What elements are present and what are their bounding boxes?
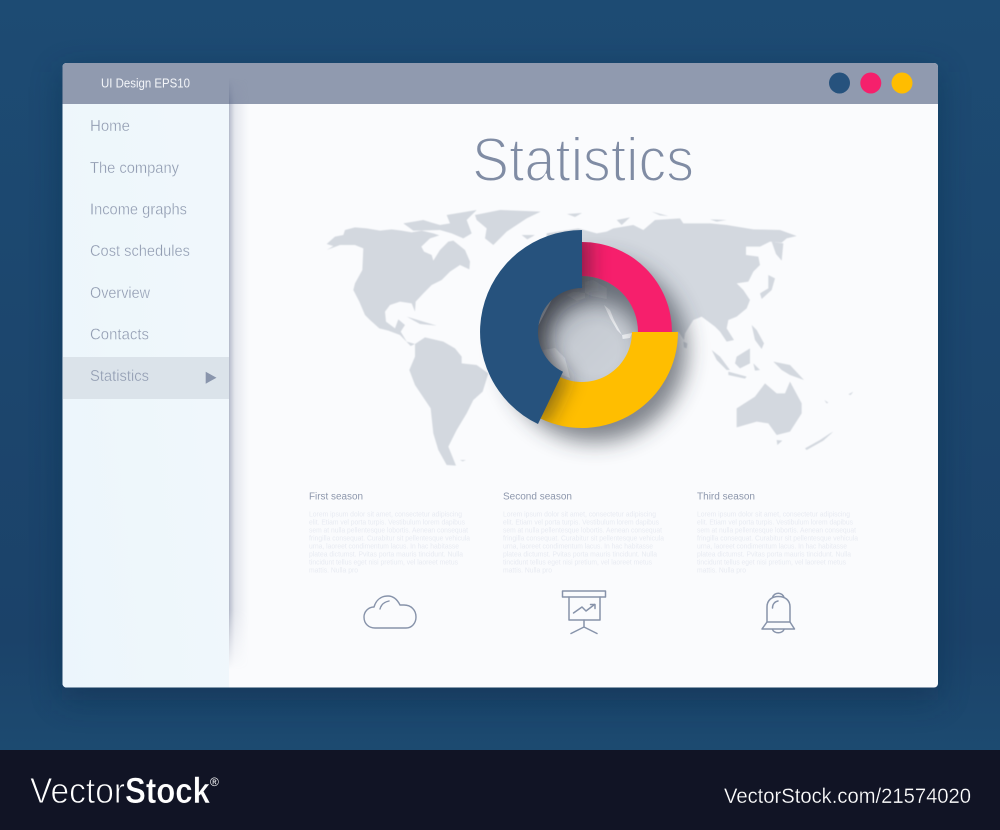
body text: fringilla consequat. Curabitur sit pellentesque vehicula bbox=[503, 534, 665, 542]
column: second season bbox=[503, 492, 665, 574]
body text: fringilla consequat. Curabitur sit pellentesque vehicula bbox=[697, 534, 859, 542]
body text: urna, laoreet condimentum lacus. In hac habitasse bbox=[697, 542, 847, 550]
heading: Second season bbox=[503, 492, 572, 502]
footer logo: ® bbox=[210, 775, 219, 789]
donut drop shadow bbox=[503, 258, 687, 442]
icon: cloud bbox=[364, 596, 416, 628]
footer logo: Vector bbox=[30, 770, 125, 811]
body text: elit. Etiam vel porta turpis. Vestibulum lorem dapibus bbox=[697, 518, 853, 526]
body text: platea dictumst. Pvitas porta mauris tincidunt. Nulla bbox=[697, 550, 852, 558]
footer image id: VectorStock.com/21574020 bbox=[724, 784, 971, 808]
body text bbox=[503, 510, 665, 574]
nav: Overview: Overview bbox=[90, 285, 151, 302]
column: third season bbox=[697, 492, 859, 574]
heading: Third season bbox=[697, 492, 755, 502]
body text: platea dictumst. Pvitas porta mauris tincidunt. Nulla bbox=[503, 550, 658, 558]
panel: sidebar navigation bbox=[62, 104, 229, 688]
nav: Contacts: Contacts bbox=[90, 326, 149, 344]
header bar bbox=[62, 63, 938, 104]
body text: tincidunt tellus eget nisi pretium, vel laoreet metus bbox=[503, 558, 652, 566]
nav: Home: Home bbox=[90, 118, 130, 135]
body text: platea dictumst. Pvitas porta mauris tincidunt. Nulla bbox=[309, 550, 464, 558]
body text: sem at nulla pellentesque lobortis. Aenean consequat bbox=[503, 526, 662, 534]
window shadow bbox=[62, 72, 938, 700]
body text bbox=[697, 510, 859, 574]
body text: fringilla consequat. Curabitur sit pellentesque vehicula bbox=[309, 534, 471, 542]
body text: mattis. Nulla pro bbox=[309, 566, 358, 574]
body text: tincidunt tellus eget nisi pretium, vel laoreet metus bbox=[309, 558, 458, 566]
body text: urna, laoreet condimentum lacus. In hac habitasse bbox=[503, 542, 653, 550]
body text: Lorem ipsum dolor sit amet, consectetur adipiscing bbox=[309, 510, 462, 518]
active item highlight bbox=[63, 357, 229, 399]
footer logo bbox=[30, 770, 219, 811]
title: Statistics bbox=[472, 126, 694, 195]
segment: blue bbox=[480, 230, 582, 424]
panel: app window bbox=[62, 63, 938, 688]
nav: Statistics: Statistics bbox=[90, 368, 149, 385]
window control dots bbox=[829, 72, 912, 94]
body text bbox=[309, 510, 471, 574]
body text: mattis. Nulla pro bbox=[503, 566, 552, 574]
body text: sem at nulla pellentesque lobortis. Aenean consequat bbox=[309, 526, 468, 534]
icon: active arrow bbox=[206, 372, 216, 384]
column: first season bbox=[309, 492, 471, 574]
footer logo: Stock bbox=[125, 770, 211, 811]
nav: The company: The company bbox=[90, 160, 179, 177]
footer bar bbox=[0, 750, 1000, 830]
segment: pink bbox=[582, 242, 672, 332]
donut chart bbox=[480, 230, 678, 428]
inner shadow from blue segment bbox=[538, 242, 604, 426]
heading: First season bbox=[309, 492, 363, 502]
body text: elit. Etiam vel porta turpis. Vestibulum lorem dapibus bbox=[309, 518, 465, 526]
segment: yellow bbox=[541, 332, 678, 428]
header title: UI Design EPS10 bbox=[101, 76, 190, 90]
icon: bell bbox=[762, 593, 794, 633]
body text: Lorem ipsum dolor sit amet, consectetur adipiscing bbox=[697, 510, 850, 518]
body text: elit. Etiam vel porta turpis. Vestibulum lorem dapibus bbox=[503, 518, 659, 526]
body text: sem at nulla pellentesque lobortis. Aenean consequat bbox=[697, 526, 856, 534]
land and sea seen through the donut hole bbox=[538, 276, 632, 382]
body text: urna, laoreet condimentum lacus. In hac habitasse bbox=[309, 542, 459, 550]
main content background bbox=[62, 63, 938, 688]
world map bbox=[315, 210, 853, 466]
icon: presentation board bbox=[562, 591, 606, 634]
body text: mattis. Nulla pro bbox=[697, 566, 746, 574]
body text: Lorem ipsum dolor sit amet, consectetur adipiscing bbox=[503, 510, 656, 518]
nav: Cost schedules: Cost schedules bbox=[90, 243, 190, 260]
body text: tincidunt tellus eget nisi pretium, vel laoreet metus bbox=[697, 558, 846, 566]
sidebar shadow bbox=[229, 87, 244, 662]
nav: Income graphs: Income graphs bbox=[90, 202, 187, 218]
